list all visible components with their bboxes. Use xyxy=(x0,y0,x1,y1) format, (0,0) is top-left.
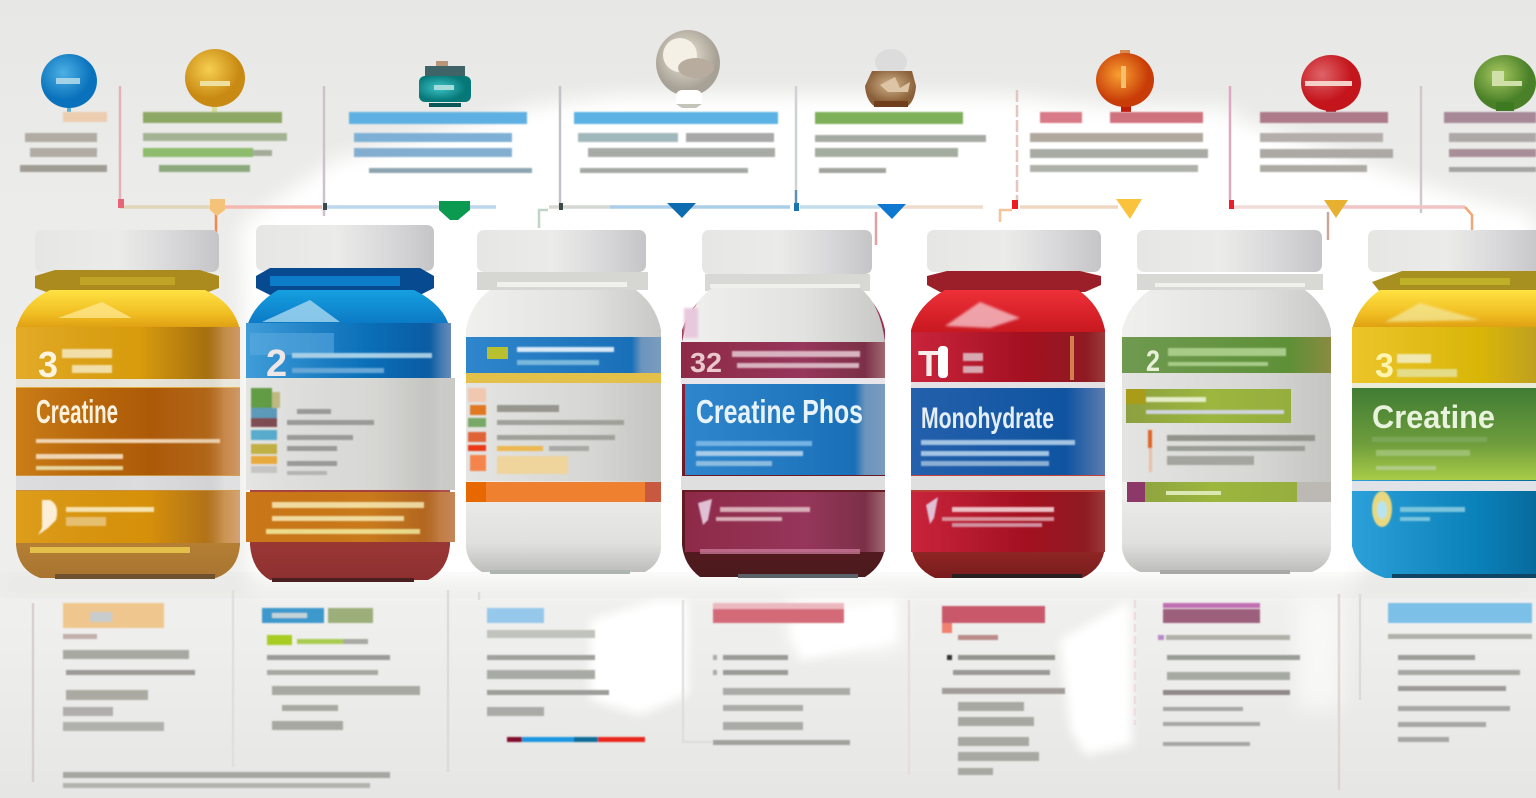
connector lines xyxy=(118,86,1472,245)
vertical dividers xyxy=(120,86,1421,216)
text block 3 xyxy=(349,112,532,173)
top red band xyxy=(911,332,1105,382)
bottom column dividers xyxy=(33,590,1360,790)
small green badge xyxy=(487,347,508,359)
horizontal timeline xyxy=(120,205,1465,209)
band lines xyxy=(1168,348,1286,366)
band lines xyxy=(732,351,860,368)
column 5 xyxy=(942,606,1065,775)
column 2 xyxy=(262,608,420,730)
column 7 xyxy=(1388,603,1532,742)
jar body xyxy=(1122,290,1331,510)
jar body xyxy=(682,290,885,577)
icon: green xyxy=(1474,55,1536,111)
description lines xyxy=(921,440,1075,466)
top icons row xyxy=(41,30,1536,112)
jar body xyxy=(250,292,450,580)
product name: Creatine xyxy=(36,393,118,430)
color strip xyxy=(468,388,486,471)
floor shadow xyxy=(0,576,1536,594)
white stripe xyxy=(1352,481,1536,491)
bottle 2: blue and rust xyxy=(246,225,455,582)
blue label xyxy=(911,388,1105,475)
band lines xyxy=(963,353,983,373)
timeline marker: blue down xyxy=(877,204,906,219)
timeline marker: yellow xyxy=(1116,199,1142,219)
bottle shading xyxy=(16,327,240,543)
label lines xyxy=(1397,354,1457,377)
lower label xyxy=(246,492,455,542)
icon: teal xyxy=(419,61,471,107)
text block 1 xyxy=(20,112,107,172)
bottle 6: white with green xyxy=(1122,230,1331,574)
timeline marker: green xyxy=(439,201,470,220)
blue label xyxy=(685,384,885,475)
icon xyxy=(926,497,938,524)
gray panel xyxy=(466,383,661,481)
label number: T xyxy=(918,343,940,384)
cap xyxy=(1137,230,1322,272)
description lines xyxy=(1372,437,1487,470)
olive band xyxy=(1127,482,1297,502)
white stripe xyxy=(681,476,885,490)
icon xyxy=(1372,491,1392,527)
text block 2 xyxy=(143,112,287,172)
lower label xyxy=(16,491,240,543)
olive header xyxy=(1126,389,1291,423)
white glow behind the layout xyxy=(240,95,1536,710)
top yellow label xyxy=(1352,327,1536,383)
top label xyxy=(16,327,240,379)
column 4 xyxy=(713,603,850,745)
lower lines xyxy=(266,502,424,534)
lower lines xyxy=(716,507,810,521)
neck ring xyxy=(1137,274,1323,290)
white patches in lower columns xyxy=(590,600,1132,755)
neck ring xyxy=(477,272,648,290)
jar body xyxy=(466,290,661,510)
cap xyxy=(927,230,1101,272)
panel lines xyxy=(497,405,624,474)
bottle 7: yellow, green and blue xyxy=(1352,230,1536,578)
cap xyxy=(35,230,219,272)
icon: blue xyxy=(41,54,97,112)
light panel xyxy=(1122,373,1331,482)
description lines xyxy=(36,439,220,470)
top text blocks (illegible in source, drawn as soft lines) xyxy=(20,112,1536,173)
label lines xyxy=(62,349,112,373)
label number: 2 xyxy=(266,343,287,385)
label number: 3 xyxy=(1375,347,1394,385)
label lines xyxy=(292,353,432,373)
product name: Creatine xyxy=(1372,399,1495,435)
cap xyxy=(477,230,646,272)
text block 5 xyxy=(815,112,986,173)
main label xyxy=(16,388,240,475)
icon: red xyxy=(1301,55,1361,112)
bottle 5: red and blue xyxy=(911,230,1105,578)
neck ring xyxy=(1372,271,1536,292)
icon: gold xyxy=(185,49,245,112)
white stripe xyxy=(16,379,240,387)
header lines xyxy=(1146,397,1284,414)
bottle 1: gold xyxy=(16,230,240,579)
white stripe lower xyxy=(16,476,240,490)
text block 6 xyxy=(1030,112,1208,172)
blue lower label xyxy=(1352,491,1536,547)
lower lines xyxy=(942,507,1054,527)
bottom text blocks (illegible in source, drawn as soft lines) xyxy=(63,603,1532,788)
lower label xyxy=(911,492,1105,552)
text block 8 xyxy=(1444,112,1536,172)
neck ring xyxy=(256,268,434,295)
cap xyxy=(1368,230,1536,272)
column 1 xyxy=(63,603,390,788)
neck ring xyxy=(705,274,870,291)
gray panel xyxy=(246,378,455,490)
neck ring xyxy=(35,270,219,295)
lower label xyxy=(685,492,885,552)
blue band xyxy=(466,337,661,373)
icon: orange xyxy=(1096,50,1154,112)
description lines xyxy=(696,441,812,466)
text block 4 xyxy=(574,112,778,173)
timeline marker: blue xyxy=(667,203,696,218)
bottle 4: maroon and blue xyxy=(681,230,885,578)
product name: Monohydrate xyxy=(921,402,1054,435)
icon xyxy=(698,499,712,525)
bottle 3: white with blue and orange xyxy=(466,230,661,574)
small corner stubs xyxy=(216,207,1472,245)
band lines xyxy=(517,347,614,365)
jar body xyxy=(911,290,1105,578)
cap xyxy=(702,230,872,274)
label number: 32 xyxy=(690,347,722,378)
timeline marker: amber xyxy=(1324,200,1348,218)
timeline marker: orange xyxy=(210,199,225,216)
neck ring xyxy=(927,271,1101,292)
column 6 xyxy=(1158,603,1300,746)
cap xyxy=(256,225,434,271)
green label xyxy=(1352,388,1536,480)
orange band xyxy=(466,482,661,502)
jar body xyxy=(16,292,240,578)
icon: brown xyxy=(865,49,916,107)
yellow stripe xyxy=(466,373,661,383)
top label xyxy=(246,323,451,378)
panel lines xyxy=(287,409,374,475)
lower icon and lines xyxy=(38,500,154,535)
label number: 2 xyxy=(1146,345,1160,378)
white stripe xyxy=(911,476,1105,490)
icon: silver xyxy=(656,30,720,108)
column 3 xyxy=(487,608,609,716)
panel lines xyxy=(1148,430,1315,472)
label number: 3 xyxy=(38,344,58,385)
text block 7 xyxy=(1260,112,1393,172)
green band xyxy=(1122,337,1331,373)
jar body xyxy=(1352,292,1536,578)
color strip xyxy=(251,388,280,473)
lower lines xyxy=(1400,507,1465,521)
bottle shading xyxy=(246,323,455,542)
column 3 color bar xyxy=(507,737,645,742)
product name: Creatine Phos xyxy=(696,393,863,430)
top maroon band xyxy=(681,342,885,378)
